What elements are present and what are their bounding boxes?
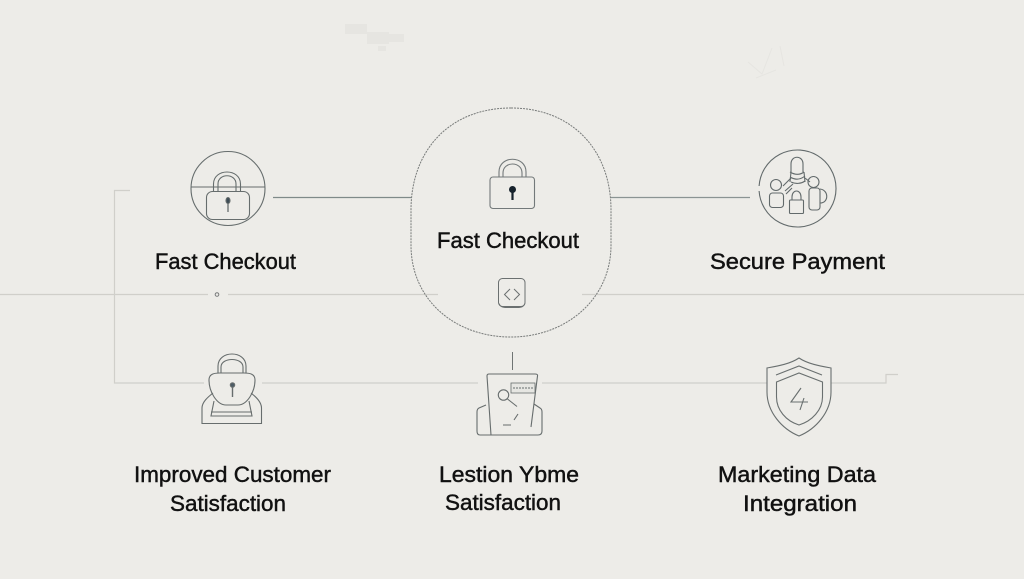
- icon: padlock: [490, 159, 534, 208]
- panel: marketing data integration: [718, 358, 877, 516]
- panel: secure payment: [710, 150, 885, 274]
- label: fast checkout: Fast Checkout: [437, 228, 579, 253]
- faint smudge: top centre: [345, 24, 404, 51]
- label: lestion ybme satisfaction: Lestion Ybme: [439, 462, 579, 487]
- label: lestion ybme satisfaction: Satisfaction: [445, 490, 561, 515]
- label: fast checkout: Fast Checkout: [155, 249, 296, 274]
- panel: left node, fast checkout: [155, 152, 296, 274]
- icon: padlock in circle: [191, 152, 265, 226]
- icon: document with magnifier: [477, 374, 542, 435]
- icon: small code box: [498, 278, 525, 308]
- label: improved customer satisfaction: [134, 462, 331, 516]
- connector: centre to right node: [611, 196, 750, 198]
- timeline dot: [215, 293, 219, 296]
- panel: lestion ybme satisfaction: [439, 374, 579, 515]
- dashed rounded outline: [411, 108, 611, 337]
- icon: padlock on stand: [202, 354, 262, 424]
- label: marketing data integration: Integration: [743, 491, 857, 516]
- label: marketing data integration: Marketing Data: [718, 462, 877, 487]
- faint smudge: top right: [748, 46, 784, 78]
- label: marketing data integration: [718, 462, 877, 516]
- panel: improved customer satisfaction: [134, 354, 331, 516]
- connector: left node to centre: [273, 196, 411, 198]
- icon: shield with bolt: [767, 358, 831, 436]
- label: improved customer satisfaction: Satisfaction: [170, 491, 286, 516]
- label: secure payment: Secure Payment: [710, 249, 885, 274]
- label: improved customer satisfaction: Improved Customer: [134, 462, 331, 487]
- label: lestion ybme satisfaction: [439, 462, 579, 515]
- icon: group of people in circle: [759, 150, 836, 227]
- panel: centre highlight: [411, 108, 611, 337]
- connector: centre down to bottom node: [512, 352, 514, 370]
